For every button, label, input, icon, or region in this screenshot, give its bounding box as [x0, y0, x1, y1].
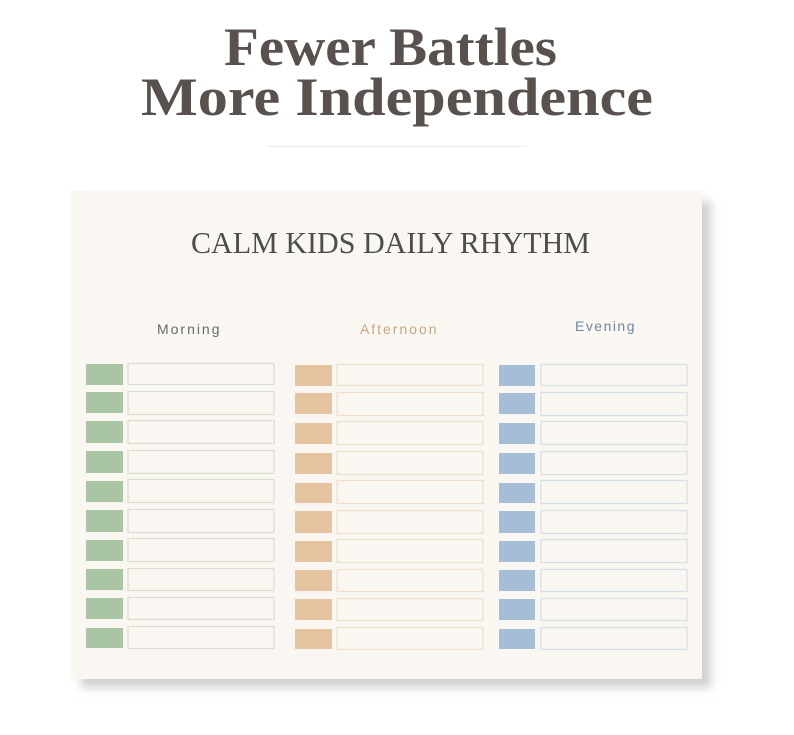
- title: [141, 17, 653, 127]
- title: More Independence: [141, 67, 653, 127]
- column: afternoon: [295, 321, 483, 650]
- title: Fewer Battles: [224, 17, 557, 77]
- evening label: Evening: [575, 318, 634, 334]
- afternoon label: Afternoon: [360, 321, 436, 337]
- panel: calm kids daily rhythm chart: [71, 191, 711, 688]
- column: morning: [86, 321, 274, 648]
- morning label: Morning: [157, 321, 220, 337]
- chart heading: CALM KIDS DAILY RHYTHM: [191, 225, 590, 260]
- column: evening: [499, 318, 687, 650]
